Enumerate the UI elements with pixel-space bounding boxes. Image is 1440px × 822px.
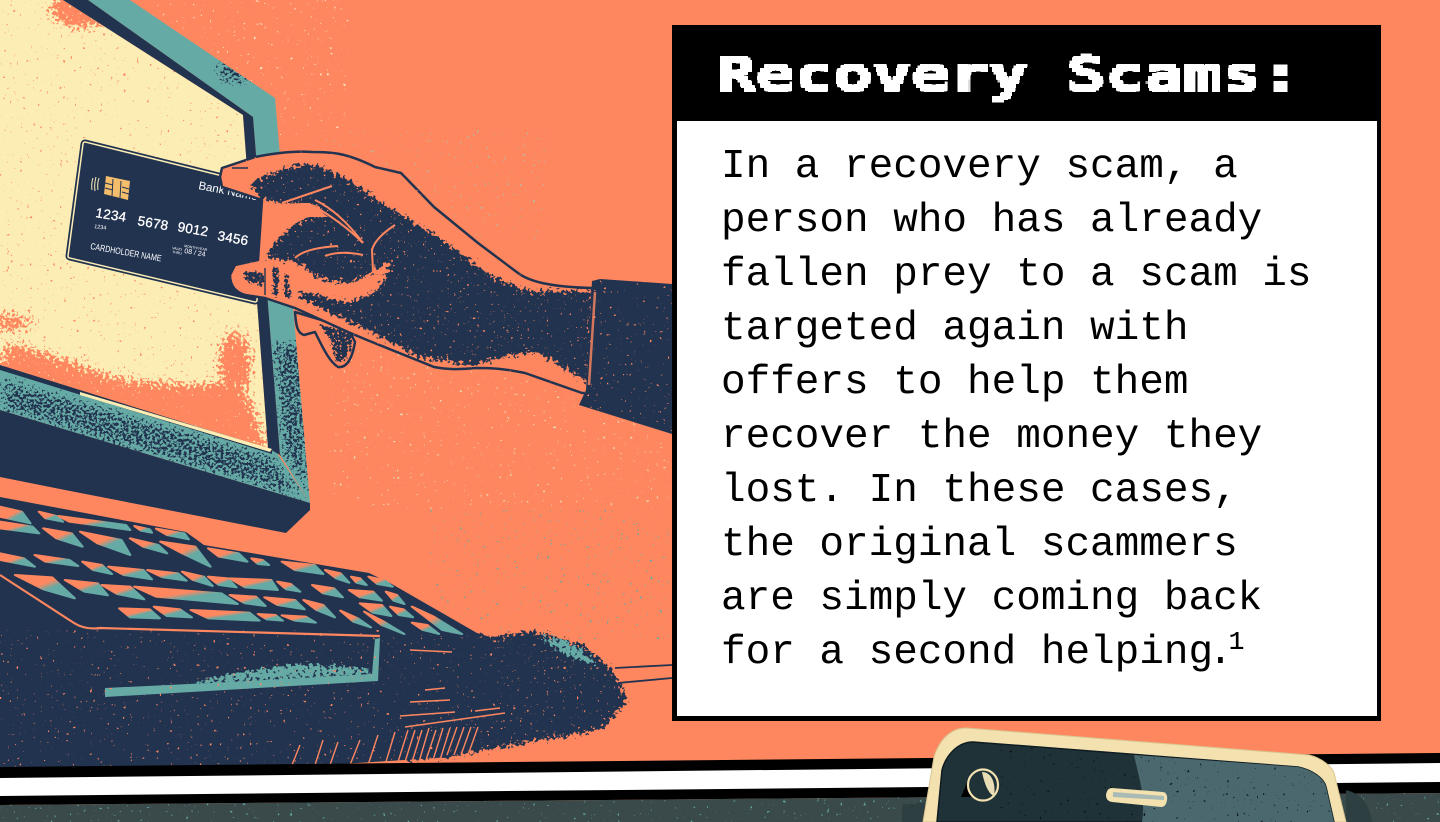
card contactless icon (92, 177, 99, 191)
monitor navy inner frame (63, 0, 280, 455)
card number (95, 205, 250, 248)
hand outline and base (220, 152, 592, 393)
card number: 9012 (176, 219, 210, 239)
phone cream body (923, 728, 1346, 822)
mouse and shadow tail (400, 630, 629, 762)
phone screen reflection (1134, 755, 1334, 822)
card chip (104, 176, 130, 200)
phone camera (961, 770, 998, 800)
monitor screen (0, 0, 275, 465)
keyboard front teal bar (105, 638, 380, 697)
card small number: 1234 (94, 224, 107, 232)
mouse cable (615, 665, 672, 683)
phone speaker (1106, 788, 1167, 807)
little finger curl (295, 312, 355, 367)
mouse highlight (535, 636, 604, 668)
card number: 3456 (216, 228, 250, 248)
monitor screen lower edge highlight (0, 365, 272, 454)
desk shadow mass (0, 497, 500, 775)
card validity: THRU (172, 250, 183, 256)
heading: Recovery Scams: (720, 47, 1300, 103)
cardholder name: CARDHOLDER NAME (90, 241, 162, 263)
phone screen specks (1000, 745, 1340, 822)
phone shadow (902, 790, 1372, 822)
computer monitor (0, 0, 312, 533)
hand creases (282, 186, 395, 272)
hand holding the card (220, 150, 673, 436)
lower panel dark background strip (0, 790, 1440, 822)
credit card (70, 144, 263, 300)
phone screen (937, 742, 1334, 822)
brush streaks (292, 650, 505, 765)
keyboard keys (0, 507, 462, 634)
card bank name: Bank Name (197, 180, 259, 203)
description text: In a recovery scam, a person who has already fallen prey to a scam is targeted again with offers to help them recover the money they lost. In these cases, the original scammers are simply coming back for a second helping.¹ (721, 144, 1312, 676)
monitor underside (0, 410, 310, 533)
monitor teal bezel (0, 0, 312, 505)
desk speckles (0, 630, 630, 770)
thumb nail shading (243, 266, 292, 300)
keyboard front edge (0, 575, 380, 636)
card validity: VALID (172, 246, 183, 252)
panel: recovery scams (672, 25, 1381, 721)
card number: 5678 (136, 213, 170, 233)
smartphone (902, 728, 1372, 822)
card validity: 08 / 24 (184, 248, 206, 259)
body text box (677, 121, 1377, 716)
keyboard and mouse (0, 497, 672, 775)
hand shadow mass (228, 150, 598, 395)
card validity (172, 244, 208, 259)
thumb and index nail lines (232, 168, 265, 295)
card number: 1234 (95, 205, 128, 225)
shirt sleeve (578, 278, 673, 436)
background speckles (140, 0, 670, 640)
card validity: MONTH/YEAR (184, 244, 208, 252)
diagonal divider band (0, 753, 1440, 805)
